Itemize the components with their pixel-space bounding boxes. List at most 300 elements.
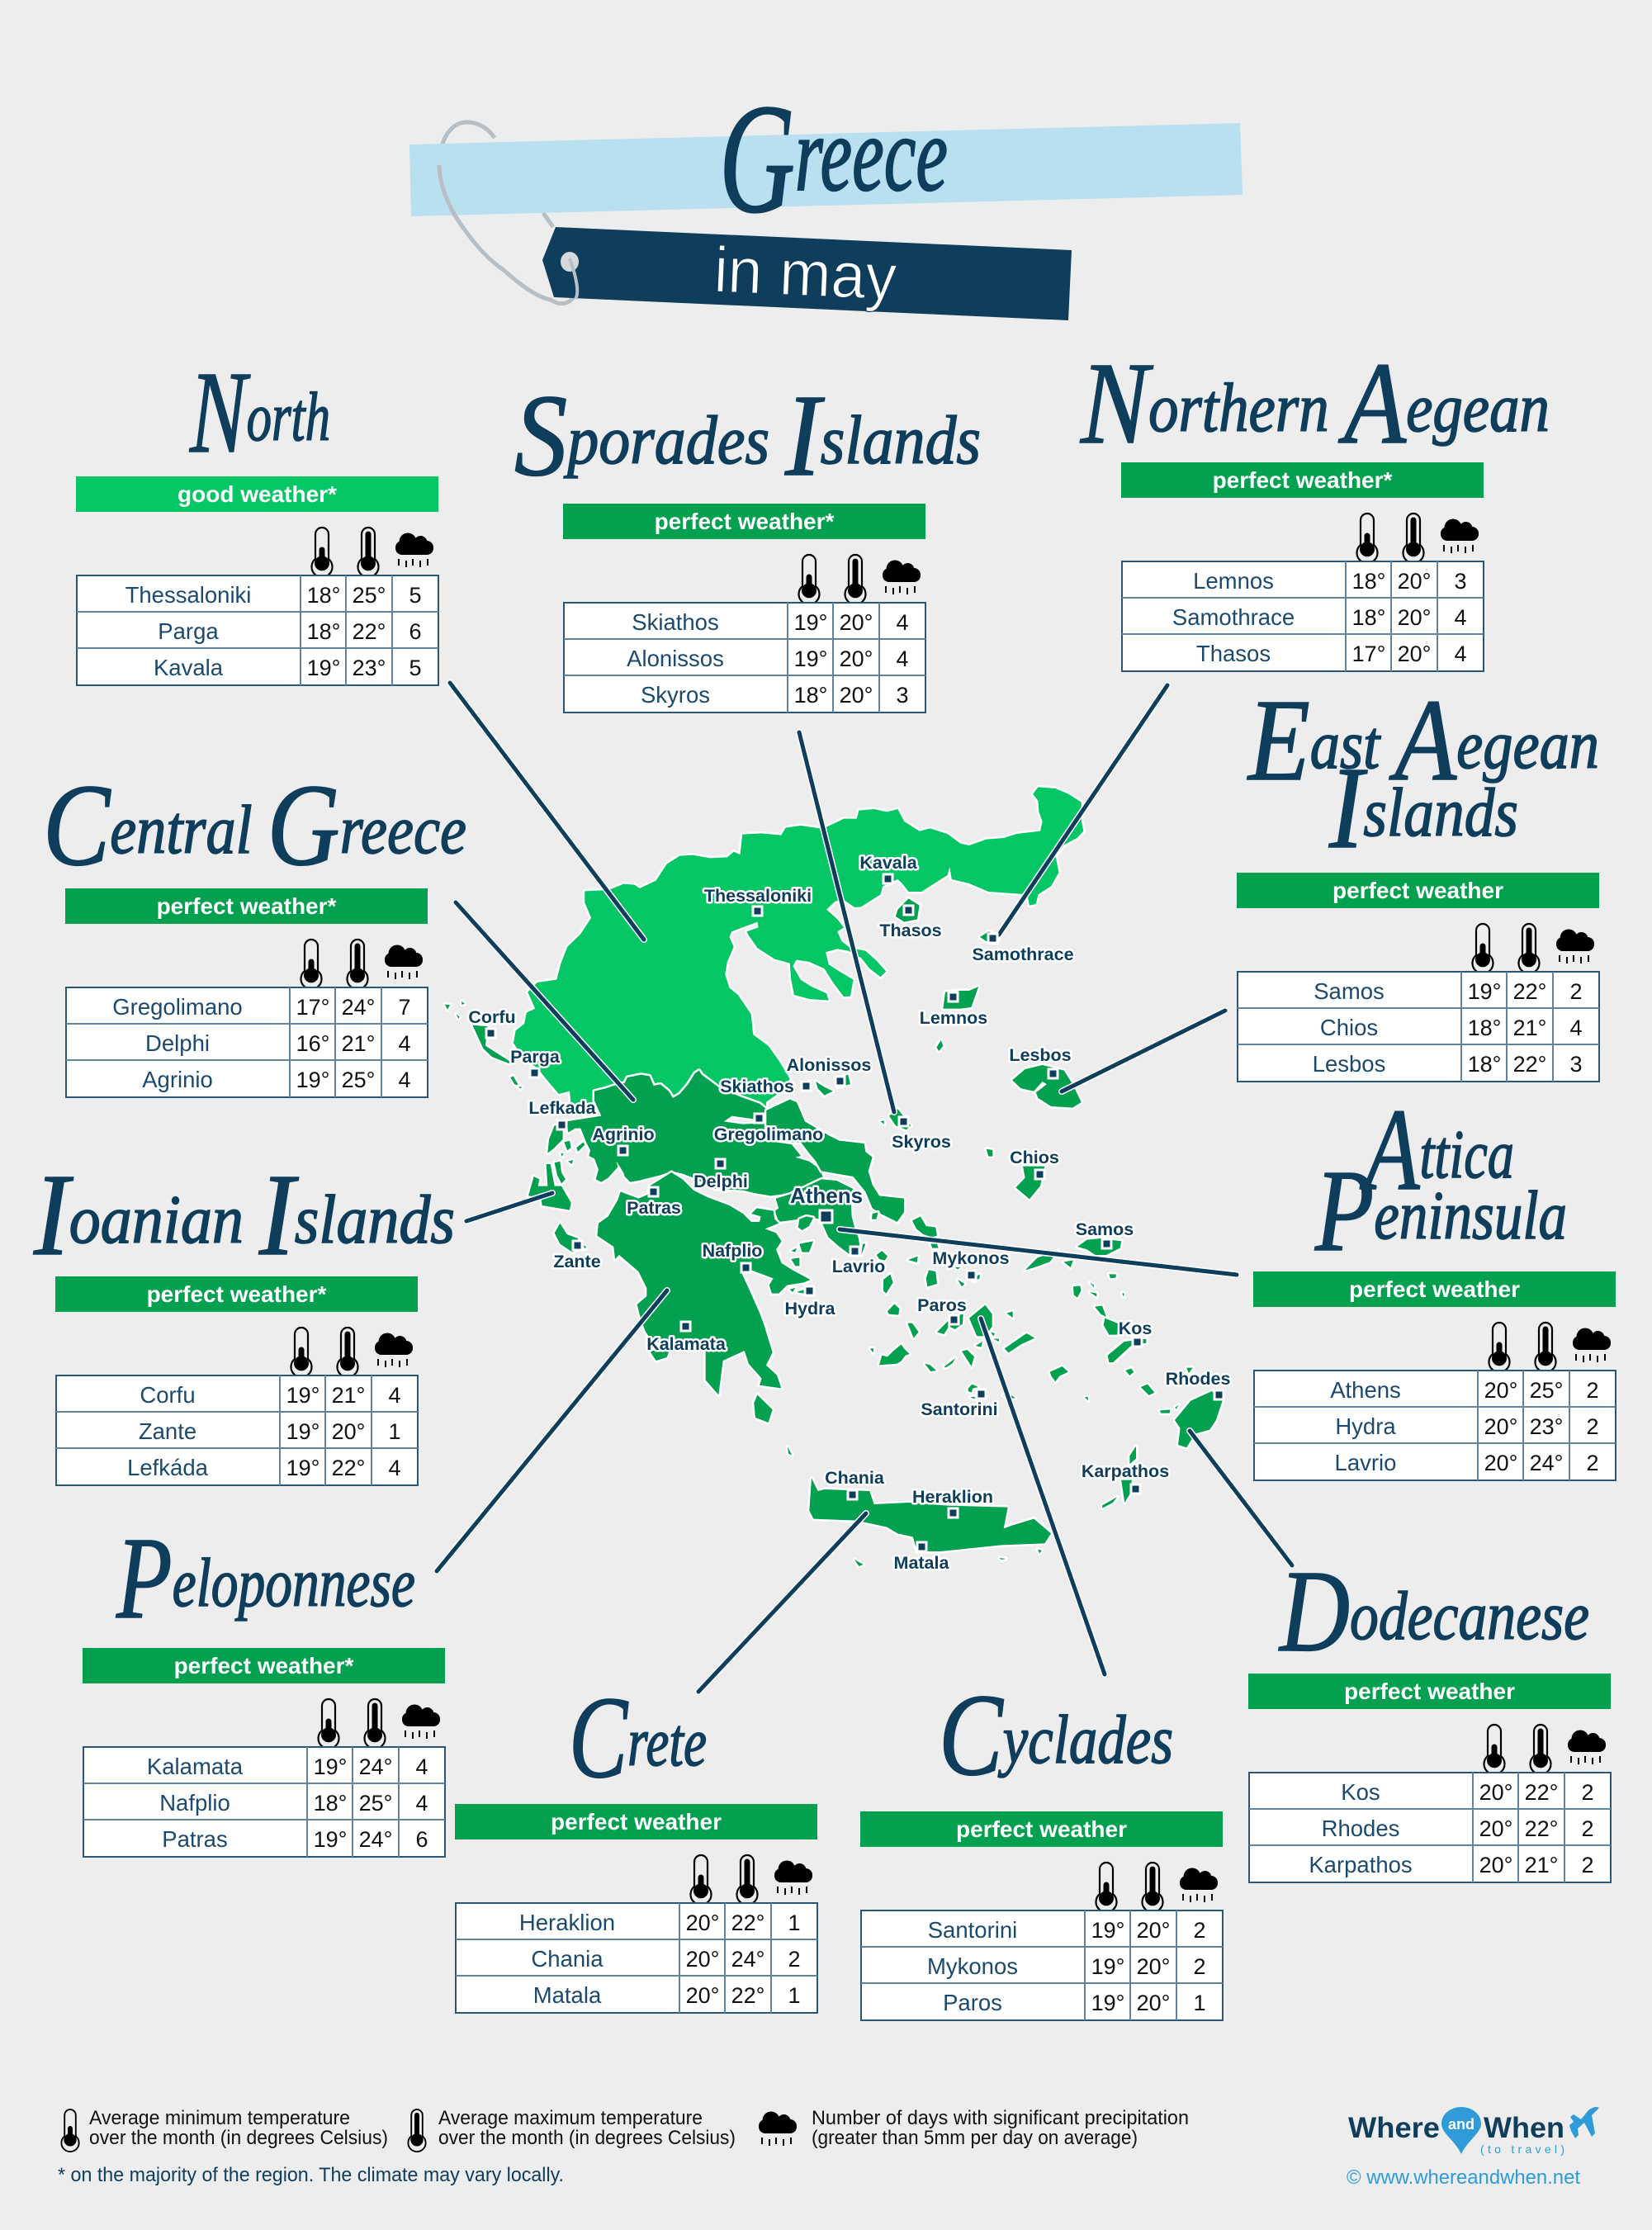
icon: rain — [385, 945, 423, 979]
table: Lavrio — [1335, 1450, 1396, 1475]
table: Athens — [1330, 1377, 1401, 1403]
table: 19° — [1091, 1918, 1124, 1943]
table: 23° — [353, 656, 386, 680]
icon: min temperature — [319, 1699, 338, 1749]
city labels: Alonissos — [787, 1055, 871, 1075]
table: 22° — [1513, 1052, 1546, 1077]
banner — [1121, 462, 1484, 498]
table: 22° — [1525, 1816, 1558, 1841]
table: 23° — [1530, 1414, 1563, 1439]
table: Chania — [531, 1946, 604, 1972]
table: 17° — [296, 995, 329, 1020]
heading: North: N — [189, 347, 251, 477]
table: Thasos — [1196, 641, 1271, 666]
city labels — [468, 853, 1230, 1573]
heading: Northern Aegean: orthern — [1148, 370, 1344, 447]
table: 20° — [1137, 1954, 1170, 1979]
table: Zante — [139, 1418, 196, 1444]
Central Greece mainland — [566, 1071, 823, 1195]
city labels: Paros — [917, 1295, 967, 1315]
table: 24° — [342, 995, 375, 1020]
weather block: Cyclades — [860, 1811, 1223, 2020]
table: 25° — [342, 1068, 375, 1092]
weather block: North — [76, 476, 438, 685]
city labels: Corfu — [468, 1007, 516, 1027]
table: 19° — [296, 1068, 329, 1092]
banner: good weather* — [178, 481, 337, 507]
logo pin — [1441, 2107, 1481, 2154]
table: 4 — [388, 1383, 401, 1408]
title band — [409, 123, 1243, 216]
table: 2 — [1193, 1918, 1206, 1943]
table: 18° — [307, 619, 340, 644]
leader line: Dodecanese — [1190, 1431, 1292, 1565]
table: 20° — [840, 683, 873, 708]
weather block: Attica — [1253, 1271, 1616, 1480]
city labels: Santorini — [921, 1399, 998, 1419]
heading: Ioanian Islands: I — [258, 1149, 299, 1280]
icon: legend min temperature — [61, 2109, 79, 2152]
table: 4 — [896, 646, 909, 671]
table: Rhodes — [1322, 1816, 1399, 1841]
heading: Crete: C — [569, 1672, 629, 1802]
legend text: rain: Number of days with significant precipitation — [812, 2107, 1189, 2129]
table: 22° — [332, 1456, 365, 1480]
region: dark islands north — [445, 898, 1082, 1129]
icon: rain — [1556, 930, 1594, 963]
heading: Crete: rete — [627, 1704, 707, 1781]
table: 18° — [1352, 569, 1385, 594]
heading: Central Greece: entral — [110, 792, 267, 869]
table: 22° — [353, 619, 386, 644]
city labels: Skyros — [892, 1132, 951, 1152]
Attica — [774, 1179, 860, 1255]
table: 4 — [896, 610, 909, 635]
table: 20° — [1398, 569, 1431, 594]
city labels: Hydra — [785, 1299, 836, 1319]
banner — [455, 1804, 817, 1839]
city labels: Gregolimano — [714, 1124, 823, 1144]
region: Dodecanese south — [1102, 1368, 1223, 1508]
city labels: Zante — [553, 1252, 601, 1271]
banner: perfect weather* — [157, 893, 337, 919]
tag string end — [570, 258, 577, 299]
legend text: min temperature — [89, 2107, 388, 2149]
panel: Ioanian Islands — [33, 1149, 455, 1485]
icon: min temperature — [312, 528, 332, 577]
table — [1254, 1371, 1616, 1480]
weather block: Crete — [455, 1804, 817, 2013]
table: 3 — [896, 683, 909, 708]
leader line: Cyclades — [981, 1319, 1105, 1674]
table: 24° — [359, 1754, 392, 1779]
banner — [1237, 873, 1599, 908]
city labels: Patras — [627, 1198, 681, 1218]
city labels: Kalamata — [646, 1334, 727, 1354]
weather block: Central Greece — [65, 888, 428, 1097]
icon: max temperature — [1143, 1863, 1162, 1912]
leader line: Sporades — [799, 732, 894, 1112]
leader line: Central Greece — [456, 902, 633, 1100]
table: 1 — [1193, 1991, 1206, 2015]
city labels: Mykonos — [932, 1248, 1010, 1268]
heading: Attica Peninsula: ttica — [1420, 1116, 1514, 1193]
table: 21° — [342, 1031, 375, 1056]
table: 19° — [794, 610, 827, 635]
table: Alonissos — [627, 646, 724, 671]
icon: min temperature — [1357, 514, 1377, 563]
icon: rain — [1573, 1328, 1611, 1362]
banner — [55, 1276, 418, 1312]
legend text: max temperature — [438, 2107, 736, 2149]
city labels: Chios — [1010, 1148, 1059, 1167]
icon: min temperature — [1096, 1863, 1116, 1912]
table: Parga — [158, 618, 219, 644]
table: 6 — [409, 619, 422, 644]
table: Karpathos — [1309, 1852, 1413, 1877]
table — [1249, 1773, 1611, 1882]
logo tagline: (to travel) — [1480, 2142, 1564, 2156]
table: 19° — [1091, 1954, 1124, 1979]
city labels: Karpathos — [1082, 1461, 1169, 1481]
city labels: Lesbos — [1009, 1045, 1072, 1065]
table: 2 — [1569, 979, 1583, 1004]
table — [77, 575, 438, 685]
heading: East Aegean Islands: E — [1247, 675, 1310, 805]
legend text: rain: (greater than 5mm per day on average) — [812, 2127, 1138, 2149]
table: 22° — [731, 1983, 764, 2008]
banner: perfect weather — [956, 1816, 1127, 1842]
table — [564, 603, 925, 713]
table: 20° — [332, 1419, 365, 1444]
table: 25° — [359, 1791, 392, 1816]
table: 24° — [1530, 1451, 1563, 1475]
table: 21° — [1525, 1853, 1558, 1877]
heading: Peloponnese: eloponnese — [173, 1545, 415, 1622]
table: Santorini — [928, 1917, 1017, 1943]
icon: plane — [1569, 2107, 1599, 2138]
icon: min temperature — [1489, 1323, 1509, 1372]
table: 19° — [286, 1456, 320, 1480]
table: 19° — [794, 646, 827, 671]
panel: Northern Aegean — [1079, 338, 1550, 671]
city labels: Kos — [1119, 1319, 1152, 1338]
table: Samothrace — [1172, 604, 1295, 630]
table: 24° — [731, 1947, 764, 1972]
table: 20° — [1479, 1853, 1512, 1877]
icon: legend rain — [759, 2112, 797, 2146]
city labels: Lefkada — [528, 1098, 597, 1118]
banner: perfect weather* — [174, 1653, 354, 1678]
table: 19° — [1091, 1991, 1124, 2015]
icon: max temperature — [337, 1328, 358, 1377]
website: © www.whereandwhen.net — [1347, 2166, 1580, 2189]
heading: Cyclades: C — [939, 1669, 1004, 1800]
table — [83, 1747, 445, 1857]
leader line: Ionian — [466, 1193, 552, 1221]
city labels: Samos — [1076, 1219, 1134, 1239]
icon: min temperature — [301, 940, 322, 989]
table: 4 — [1454, 642, 1467, 666]
table: 20° — [840, 646, 873, 671]
region: Central Greece, Peloponnese, Crete and islands — [510, 1071, 1178, 1566]
city labels: Heraklion — [912, 1487, 993, 1507]
panel: Attica Peninsula — [1253, 1084, 1616, 1480]
table: 3 — [1454, 569, 1467, 594]
table: Lesbos — [1313, 1051, 1385, 1077]
leader line: Northern Aegean — [999, 685, 1167, 935]
icon: max temperature — [1403, 514, 1423, 563]
legend text: rain — [812, 2107, 1189, 2149]
banner — [1248, 1674, 1611, 1709]
table: 4 — [415, 1754, 428, 1779]
table: Mykonos — [927, 1953, 1018, 1979]
weather block: East Aegean — [1237, 873, 1599, 1082]
table: 22° — [1525, 1780, 1558, 1805]
heading: Central Greece: G — [267, 760, 340, 890]
table: Delphi — [145, 1030, 210, 1056]
heading: Central Greece: C — [43, 760, 111, 890]
heading: Ioanian Islands: oanian — [69, 1181, 259, 1258]
city labels: Chania — [825, 1468, 885, 1488]
icon: max temperature — [736, 1855, 758, 1905]
city labels: Athens — [790, 1183, 863, 1208]
table: Lefkáda — [127, 1455, 209, 1480]
map of Greece — [437, 683, 1292, 1692]
icon: max temperature — [365, 1699, 385, 1749]
panel: Central Greece — [43, 760, 466, 1097]
icon: max temperature — [347, 940, 368, 989]
heading: Attica Peninsula: eninsula — [1374, 1177, 1567, 1254]
city labels: Skiathos — [720, 1077, 794, 1096]
table: 24° — [359, 1827, 392, 1852]
legend text: max temperature: Average maximum temperature — [438, 2107, 703, 2129]
heading: Northern Aegean: A — [1338, 338, 1407, 468]
table — [56, 1375, 418, 1485]
heading: Northern Aegean: N — [1079, 338, 1153, 468]
price tag — [542, 227, 1072, 320]
heading: Cyclades: yclades — [997, 1702, 1173, 1778]
heading: North: orth — [247, 379, 330, 456]
table: 20° — [686, 1983, 719, 2008]
heading: Ioanian Islands: I — [33, 1149, 73, 1280]
banner: perfect weather — [1349, 1276, 1520, 1302]
leader line: East Aegean — [1062, 1011, 1225, 1091]
table: 1 — [788, 1910, 801, 1935]
heading: East Aegean Islands: ast — [1310, 707, 1394, 784]
city labels: Kavala — [859, 853, 918, 873]
heading: Dodecanese: odecanese — [1350, 1578, 1589, 1655]
table: 21° — [1513, 1016, 1546, 1040]
table: 6 — [415, 1827, 428, 1852]
table: Thessaloniki — [125, 582, 251, 608]
panel: East Aegean Islands — [1237, 675, 1599, 1082]
panel: Peloponnese — [83, 1513, 445, 1857]
leader line: North — [450, 683, 644, 940]
icon: min temperature — [291, 1328, 312, 1377]
banner — [1253, 1271, 1616, 1307]
table: 4 — [398, 1068, 411, 1092]
heading: Dodecanese: D — [1278, 1546, 1350, 1676]
table: Lemnos — [1193, 568, 1274, 594]
icon: rain — [402, 1704, 440, 1739]
city markers — [486, 874, 1224, 1551]
icon: max temperature — [1531, 1725, 1550, 1774]
table — [456, 1903, 817, 2013]
table: 1 — [388, 1419, 401, 1444]
heading: Sporades Islands: I — [784, 370, 825, 500]
logo word: Where: Where — [1348, 2112, 1440, 2144]
table: 19° — [286, 1383, 320, 1408]
banner — [83, 1648, 445, 1683]
panel: North — [76, 347, 438, 685]
table: Kos — [1341, 1779, 1380, 1805]
city labels: Parga — [510, 1047, 561, 1067]
table: 4 — [398, 1031, 411, 1056]
icon: rain — [375, 1333, 413, 1367]
city labels: Thasos — [879, 921, 942, 940]
table: 5 — [409, 656, 422, 680]
banner: perfect weather — [1344, 1678, 1515, 1704]
icon: min temperature — [1484, 1725, 1504, 1774]
table: 4 — [1569, 1016, 1583, 1040]
logo — [1347, 2107, 1599, 2189]
table: 22° — [731, 1910, 764, 1935]
table: 16° — [296, 1031, 329, 1056]
subtitle: in may — [712, 233, 898, 314]
icon: max temperature — [358, 528, 378, 577]
table: 2 — [1581, 1853, 1594, 1877]
heading: East Aegean Islands — [1247, 675, 1599, 873]
weather block: Sporades — [563, 504, 925, 713]
table: 18° — [1468, 1052, 1501, 1077]
heading: Attica Peninsula: A — [1360, 1084, 1420, 1214]
table: 20° — [1137, 1918, 1170, 1943]
table — [66, 987, 428, 1097]
title text: G — [719, 73, 795, 246]
table: Nafplio — [159, 1790, 230, 1816]
weather block: Peloponnese — [83, 1648, 445, 1857]
panel: Crete — [455, 1672, 817, 2013]
region: North mainland — [514, 787, 1083, 1117]
Ionian islands — [547, 1124, 563, 1153]
table: 2 — [1581, 1816, 1594, 1841]
tag string upper — [439, 122, 495, 229]
table: 19° — [286, 1419, 320, 1444]
table: 19° — [314, 1827, 347, 1852]
city labels: Matala — [894, 1553, 949, 1573]
city labels: Delphi — [693, 1172, 748, 1191]
heading: Sporades Islands: slands — [821, 402, 981, 479]
panel: Cyclades — [860, 1669, 1223, 2020]
legend text: min temperature: Average minimum temperature — [89, 2107, 350, 2129]
table: 2 — [1586, 1378, 1599, 1403]
heading: Attica Peninsula — [1314, 1084, 1567, 1276]
Crete — [809, 1478, 1051, 1551]
panel: Dodecanese — [1248, 1546, 1611, 1882]
icon: min temperature — [690, 1855, 712, 1905]
legend — [58, 2107, 1189, 2186]
icon: rain — [1441, 518, 1479, 553]
weather block: Dodecanese — [1248, 1674, 1611, 1882]
title block — [409, 73, 1243, 320]
heading: Sporades Islands: porades — [564, 402, 785, 479]
table: 2 — [1586, 1451, 1599, 1475]
heading: East Aegean Islands: I — [1328, 742, 1367, 873]
table: 20° — [1137, 1991, 1170, 2015]
table: 5 — [409, 583, 422, 608]
table: 20° — [1484, 1451, 1517, 1475]
table: 18° — [314, 1791, 347, 1816]
table: 20° — [1479, 1816, 1512, 1841]
leader line: Attica — [840, 1229, 1237, 1275]
city labels: Agrinio — [592, 1124, 655, 1144]
footnote: * on the majority of the region. The climate may vary locally. — [58, 2164, 564, 2186]
table: Gregolimano — [112, 994, 243, 1020]
heading: Attica Peninsula: P — [1314, 1145, 1374, 1276]
table: 2 — [788, 1947, 801, 1972]
tag string — [439, 165, 576, 304]
banner: perfect weather — [551, 1809, 722, 1835]
banner — [563, 504, 925, 539]
weather block: Ioanian — [55, 1276, 418, 1485]
heading: East Aegean Islands: egean — [1456, 707, 1599, 784]
icon: max temperature — [1519, 924, 1539, 973]
table: 18° — [1352, 605, 1385, 630]
table: 1 — [788, 1983, 801, 2008]
banner — [860, 1811, 1223, 1847]
banner: perfect weather* — [147, 1281, 327, 1307]
icon: rain — [395, 533, 433, 567]
heading: Ioanian Islands: slands — [295, 1181, 455, 1258]
legend text: max temperature: over the month (in degrees Celsius) — [438, 2127, 736, 2149]
table: 4 — [415, 1791, 428, 1816]
table: Paros — [943, 1990, 1002, 2015]
table: Kavala — [154, 655, 224, 680]
heading: Peloponnese: P — [116, 1513, 173, 1643]
table: 20° — [686, 1910, 719, 1935]
table: 2 — [1193, 1954, 1206, 1979]
table — [1122, 561, 1484, 671]
table: 20° — [1479, 1780, 1512, 1805]
city labels: Samothrace — [972, 945, 1074, 964]
icon: min temperature — [1473, 924, 1493, 973]
tag hole — [561, 252, 579, 272]
table: Corfu — [140, 1382, 196, 1408]
banner — [76, 476, 438, 512]
logo word: When: When — [1484, 2112, 1564, 2144]
table — [1238, 972, 1599, 1082]
heading: Northern Aegean: egean — [1406, 370, 1550, 447]
table: 20° — [1398, 605, 1431, 630]
banner: perfect weather* — [655, 509, 835, 534]
table: 4 — [388, 1456, 401, 1480]
table: 3 — [1569, 1052, 1583, 1077]
table: Agrinio — [142, 1067, 213, 1092]
table: 20° — [1484, 1414, 1517, 1439]
table: Chios — [1320, 1015, 1378, 1040]
icon: rain — [883, 560, 921, 594]
table: Matala — [533, 1982, 602, 2008]
table: Samos — [1314, 978, 1385, 1004]
banner: perfect weather — [1332, 878, 1503, 903]
table: Kalamata — [147, 1754, 244, 1779]
logo pin: and — [1448, 2116, 1474, 2133]
table: 21° — [332, 1383, 365, 1408]
Kythira — [754, 1394, 773, 1423]
leader line: Crete — [698, 1513, 866, 1692]
table: 19° — [307, 656, 340, 680]
